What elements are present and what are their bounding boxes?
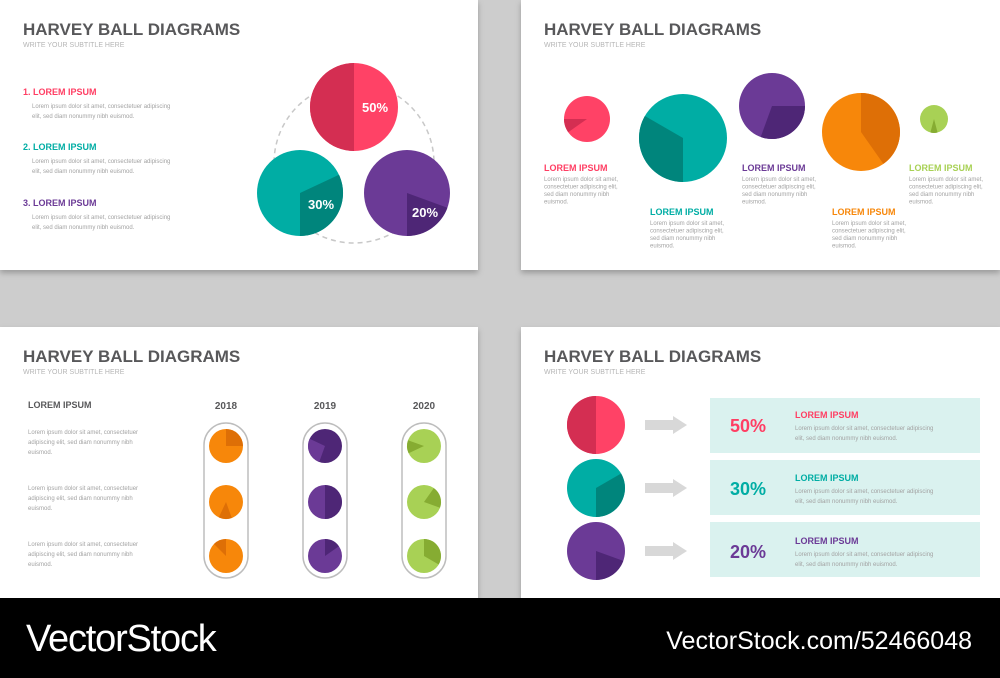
row text 2: adipiscing elit, sed diam nonummy nibh: [28, 496, 133, 502]
label pink: LOREM IPSUM: [544, 163, 608, 173]
label pink: Lorem ipsum dolor sit amet,: [544, 177, 618, 183]
row 20%: [567, 522, 980, 580]
label purple: consectetuer adipiscing elit,: [742, 184, 816, 190]
subtitle: WRITE YOUR SUBTITLE HERE: [544, 42, 646, 49]
label purple: Lorem ipsum dolor sit amet,: [742, 177, 816, 183]
item 3: Lorem ipsum dolor sit amet, consectetuer adipiscing: [32, 215, 170, 221]
label pink: euismod.: [544, 200, 569, 206]
subtitle: WRITE YOUR SUBTITLE HERE: [23, 42, 125, 49]
row text 3: adipiscing elit, sed diam nonummy nibh: [28, 552, 133, 558]
row 50%: LOREM IPSUM: [795, 410, 859, 420]
row text 1: euismod.: [28, 450, 53, 456]
label green: LOREM IPSUM: [909, 163, 973, 173]
row text 3: euismod.: [28, 562, 53, 568]
row 30%: 30%: [730, 479, 766, 499]
label orange: LOREM IPSUM: [832, 207, 896, 217]
label pink: [544, 163, 618, 206]
subtitle: WRITE YOUR SUBTITLE HERE: [23, 369, 125, 376]
ball orange: [822, 93, 900, 171]
item 1: Lorem ipsum dolor sit amet, consectetuer adipiscing: [32, 104, 170, 110]
harvey ball 30%: 30%: [308, 197, 334, 212]
panel: top-left slide: [0, 0, 478, 270]
label orange: euismod.: [832, 244, 857, 250]
label orange: consectetuer adipiscing elit,: [832, 228, 906, 234]
item 2: 2. LOREM IPSUM: [23, 142, 97, 152]
label orange: sed diam nonummy nibh: [832, 236, 897, 242]
ball purple: [739, 73, 805, 139]
row 50%: 50%: [730, 416, 766, 436]
row 50%: [567, 396, 980, 454]
row text 1: adipiscing elit, sed diam nonummy nibh: [28, 440, 133, 446]
label green: Lorem ipsum dolor sit amet,: [909, 177, 983, 183]
panel: bottom-left slide: [0, 327, 478, 598]
row 30%: Lorem ipsum dolor sit amet, consectetuer adipiscing: [795, 489, 933, 495]
label green: [909, 163, 983, 206]
item 3: [23, 198, 170, 231]
label teal: LOREM IPSUM: [650, 207, 714, 217]
label orange: Lorem ipsum dolor sit amet,: [832, 221, 906, 227]
item 3: elit, sed diam nonummy nibh euismod.: [32, 225, 135, 231]
label purple: euismod.: [742, 200, 767, 206]
harvey ball 20%: [364, 150, 450, 236]
row text 3: [28, 542, 138, 568]
column 2018: 2018: [215, 401, 238, 412]
label purple: sed diam nonummy nibh: [742, 192, 807, 198]
label green: consectetuer adipiscing elit,: [909, 184, 983, 190]
label purple: [742, 163, 816, 206]
item 1: elit, sed diam nonummy nibh euismod.: [32, 114, 135, 120]
harvey ball 50%: 50%: [362, 100, 388, 115]
label purple: LOREM IPSUM: [742, 163, 806, 173]
row text 2: [28, 486, 138, 512]
title: HARVEY BALL DIAGRAMS: [544, 347, 761, 366]
label teal: consectetuer adipiscing elit,: [650, 228, 724, 234]
label teal: sed diam nonummy nibh: [650, 236, 715, 242]
column 2019: 2019: [314, 401, 337, 412]
label green: sed diam nonummy nibh: [909, 192, 974, 198]
label pink: sed diam nonummy nibh: [544, 192, 609, 198]
harvey ball 20%: 20%: [412, 205, 438, 220]
harvey ball 50%: [310, 63, 398, 151]
ball green: [920, 105, 948, 133]
column 2020: [402, 401, 446, 578]
row header: LOREM IPSUM: [28, 400, 92, 410]
row 30%: elit, sed diam nonummy nibh euismod.: [795, 499, 898, 505]
item 1: [23, 87, 170, 120]
column 2018: [204, 401, 248, 578]
label orange: [832, 207, 906, 250]
label green: euismod.: [909, 200, 934, 206]
item 2: elit, sed diam nonummy nibh euismod.: [32, 169, 135, 175]
title: HARVEY BALL DIAGRAMS: [23, 20, 240, 39]
harvey ball 30%: [257, 150, 343, 236]
row 20%: Lorem ipsum dolor sit amet, consectetuer adipiscing: [795, 552, 933, 558]
label pink: consectetuer adipiscing elit,: [544, 184, 618, 190]
panel: top-right slide: [521, 0, 1000, 270]
label teal: Lorem ipsum dolor sit amet,: [650, 221, 724, 227]
row 30%: LOREM IPSUM: [795, 473, 859, 483]
ball pink: [564, 96, 610, 142]
footer logo: VectorStock: [26, 618, 218, 660]
subtitle: WRITE YOUR SUBTITLE HERE: [544, 369, 646, 376]
footer bar: [0, 598, 1000, 678]
row 30%: [567, 459, 980, 517]
ball teal: [639, 94, 727, 182]
dashed ring: [274, 83, 434, 243]
item 2: Lorem ipsum dolor sit amet, consectetuer adipiscing: [32, 159, 170, 165]
label teal: euismod.: [650, 244, 675, 250]
row text 3: Lorem ipsum dolor sit amet, consectetuer: [28, 542, 138, 548]
title: HARVEY BALL DIAGRAMS: [23, 347, 240, 366]
title: HARVEY BALL DIAGRAMS: [544, 20, 761, 39]
row text 1: [28, 430, 138, 456]
row 20%: elit, sed diam nonummy nibh euismod.: [795, 562, 898, 568]
item 3: 3. LOREM IPSUM: [23, 198, 97, 208]
row text 2: euismod.: [28, 506, 53, 512]
row text 1: Lorem ipsum dolor sit amet, consectetuer: [28, 430, 138, 436]
row 20%: LOREM IPSUM: [795, 536, 859, 546]
item 1: 1. LOREM IPSUM: [23, 87, 97, 97]
row 20%: 20%: [730, 542, 766, 562]
label teal: [650, 207, 724, 250]
item 2: [23, 142, 170, 175]
row text 2: Lorem ipsum dolor sit amet, consectetuer: [28, 486, 138, 492]
row 50%: Lorem ipsum dolor sit amet, consectetuer adipiscing: [795, 426, 933, 432]
column 2019: [303, 401, 347, 578]
panel: bottom-right slide: [521, 327, 1000, 598]
footer url: VectorStock.com/52466048: [666, 627, 972, 655]
row 50%: elit, sed diam nonummy nibh euismod.: [795, 436, 898, 442]
column 2020: 2020: [413, 401, 436, 412]
